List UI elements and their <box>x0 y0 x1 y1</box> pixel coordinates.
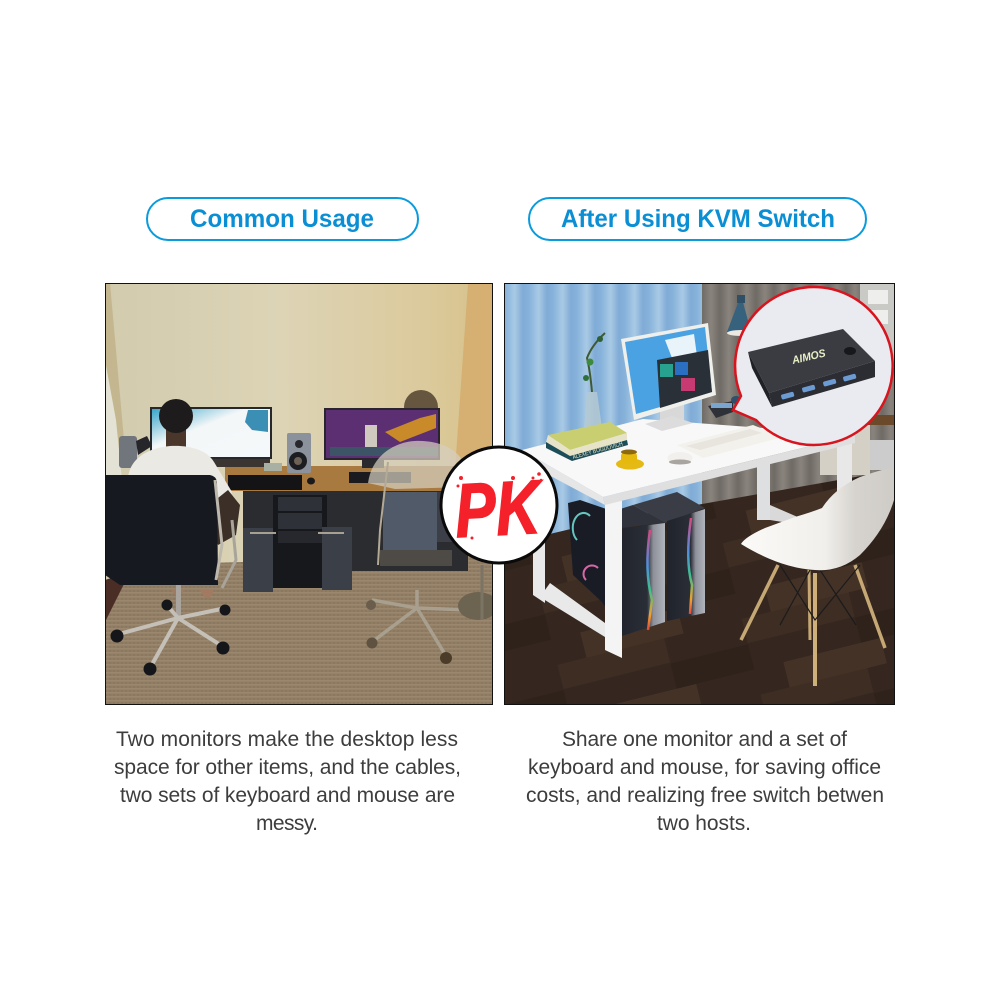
caption: common usage: space for other items, and the cables, <box>114 756 461 779</box>
ghost person's head behind screen <box>404 390 438 408</box>
panel: common usage photo <box>105 283 498 705</box>
ghosted person and chair <box>366 441 498 664</box>
plant vase <box>583 333 605 432</box>
caption: common usage <box>114 728 461 835</box>
books: ALEXEY BOGDOVICH <box>572 441 624 461</box>
PK badge: PK <box>453 465 546 554</box>
white chair <box>741 467 894 686</box>
caption: common usage: messy. <box>256 812 318 835</box>
panel: after using KVM switch photo <box>504 283 895 705</box>
caption: after using KVM switch: keyboard and mouse, for saving office <box>528 756 881 779</box>
caption: after using KVM switch: costs, and realizing free switch betwen <box>526 784 884 807</box>
caption: after using KVM switch: Share one monitor and a set of <box>562 728 847 751</box>
caption: after using KVM switch <box>526 728 884 835</box>
desktop monitor <box>621 323 716 431</box>
speaker <box>264 433 311 473</box>
heading pill: Common Usage: Common Usage <box>190 205 374 233</box>
desk <box>522 419 855 658</box>
right-side shelf items <box>820 283 895 475</box>
right monitor <box>324 408 440 468</box>
left office chair <box>105 475 236 676</box>
small KVM box on desk <box>708 396 741 418</box>
heading pill: After Using KVM Switch: After Using KVM Switch <box>561 205 835 233</box>
mouse and keyboard <box>668 425 783 464</box>
yellow cup <box>616 450 644 470</box>
caption: common usage: two sets of keyboard and mouse are <box>120 784 455 807</box>
heading pill: Common Usage <box>147 198 418 240</box>
heading pill: After Using KVM Switch <box>529 198 866 240</box>
KVM switch product: AIMOS <box>790 347 827 367</box>
caption: after using KVM switch: two hosts. <box>657 812 751 835</box>
desk and storage <box>225 466 470 592</box>
magnified KVM switch callout <box>733 287 893 445</box>
desk lamp <box>727 295 748 336</box>
books <box>546 422 628 461</box>
caption: common usage: Two monitors make the desktop less <box>116 728 458 751</box>
person at left desk <box>119 399 240 545</box>
KVM switch product <box>748 329 875 407</box>
computer towers <box>568 492 705 636</box>
left monitor <box>150 407 272 467</box>
PK badge <box>441 447 557 563</box>
